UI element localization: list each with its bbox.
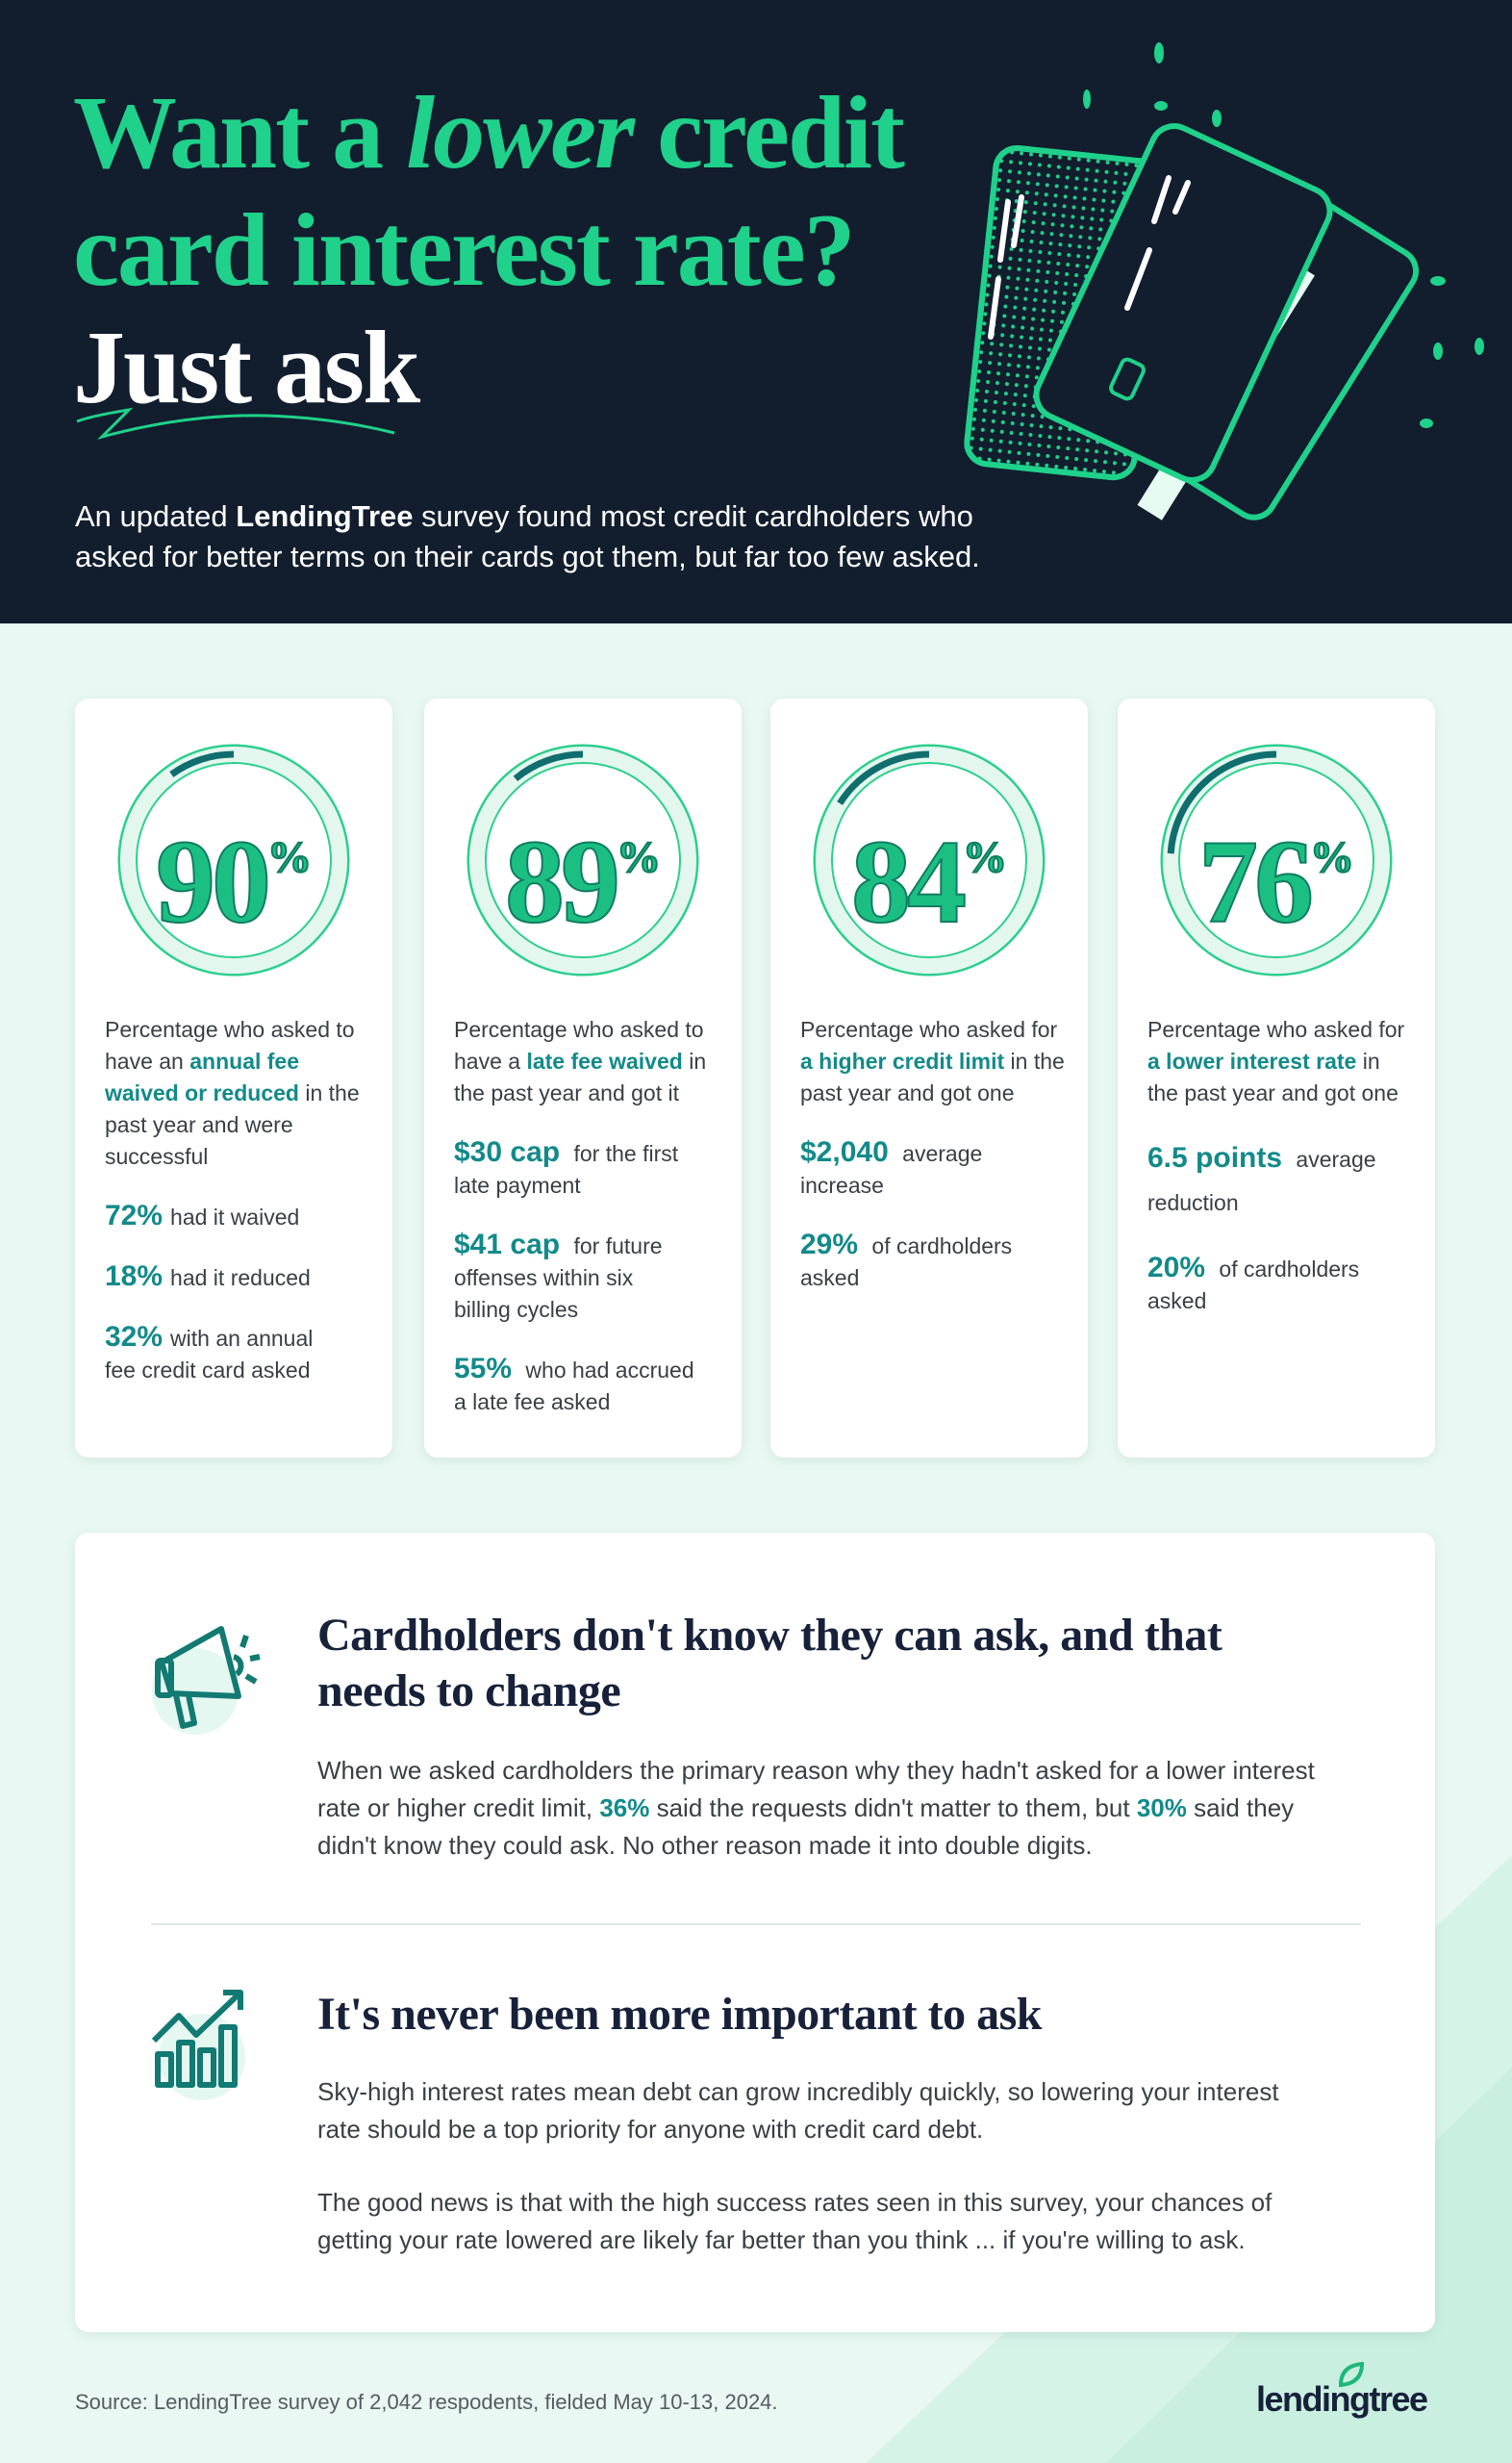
- logo: lendingtree: lendingtree: [1256, 2379, 1427, 2419]
- card text: offenses within six: [454, 1265, 633, 1290]
- card text: past year and got one: [800, 1080, 1014, 1105]
- card text: billing cycles: [454, 1297, 578, 1322]
- card text: Percentage who asked to: [105, 1017, 355, 1042]
- card text: asked: [1147, 1288, 1206, 1313]
- card text: successful: [105, 1144, 208, 1169]
- logo: lendingtree: [1256, 2362, 1427, 2419]
- background diagonal shapes: [866, 1855, 1512, 2463]
- card text: [800, 1017, 1065, 1290]
- card text: a lower interest rate in: [1147, 1049, 1380, 1074]
- card text: [454, 1017, 706, 1414]
- card text: Percentage who asked for: [1147, 1017, 1404, 1042]
- card: credit limit: [770, 698, 1088, 1458]
- title: Just ask: [73, 311, 418, 425]
- icon: growth chart: [152, 1990, 245, 2100]
- card text: 18% had it reduced: [105, 1260, 311, 1292]
- card text: Percentage who asked for: [800, 1017, 1057, 1042]
- subtitle: An updated LendingTree survey found most credit cardholders who asked for better terms on their cards got them, but far too few asked.: [75, 499, 980, 573]
- card text: $41 cap for future: [454, 1229, 663, 1260]
- card text: reduction: [1147, 1190, 1239, 1215]
- card text: fee credit card asked: [105, 1358, 311, 1383]
- card text: have a late fee waived in: [454, 1049, 706, 1074]
- heading: never more important: It's never been more important to ask: [317, 1989, 1042, 2040]
- card: interest rate: [1118, 698, 1435, 1458]
- source: Source: LendingTree survey of 2,042 respodents, fielded May 10-13, 2024.: [75, 2390, 778, 2414]
- heading: cardholders don't know: Cardholders don't know they can ask, and that needs to change: [317, 1610, 1222, 1716]
- title: card interest rate?: [73, 193, 854, 308]
- card text: 20% of cardholders: [1147, 1252, 1359, 1283]
- card text: asked: [800, 1265, 859, 1290]
- ring chart 76%: [1160, 745, 1393, 976]
- card text: the past year and got it: [454, 1080, 679, 1105]
- card text: 72% had it waived: [105, 1200, 299, 1232]
- ring chart 90%: [117, 745, 350, 976]
- card text: a higher credit limit in the: [800, 1049, 1065, 1074]
- card text: waived or reduced in the: [105, 1080, 360, 1105]
- ring chart 89%: [467, 745, 698, 976]
- card text: [1147, 1017, 1404, 1313]
- paragraph 3: The good news is that with the high success rates seen in this survey, your chances of getting your rate lowered are likely far better than you think ... if you're willing to ask.: [317, 2188, 1272, 2254]
- card text: the past year and got one: [1147, 1080, 1399, 1105]
- card: annual fee: [75, 698, 392, 1458]
- card text: 32% with an annual: [105, 1321, 313, 1353]
- paragraph 1: When we asked cardholders the primary reason why they hadn't asked for a lower interest rate or higher credit limit, 36% said the requests didn't matter to them, but 30% said they didn't know they could ask. No other reason made it into double digits.: [317, 1756, 1315, 1860]
- header band: [0, 0, 1512, 623]
- paragraph 2: Sky-high interest rates mean debt can grow incredibly quickly, so lowering your interest rate should be a top priority for anyone with credit card debt.: [317, 2077, 1279, 2144]
- card: late fee: 89%: [505, 816, 661, 948]
- card text: Percentage who asked to: [454, 1017, 704, 1042]
- card text: a late fee asked: [454, 1389, 610, 1414]
- ring chart 84%: [814, 745, 1045, 976]
- card: credit limit: 84%: [851, 816, 1007, 948]
- squiggle underline: [77, 408, 394, 440]
- card text: past year and were: [105, 1112, 293, 1137]
- card text: 6.5 points average: [1147, 1142, 1376, 1174]
- icon: megaphone: [152, 1626, 261, 1735]
- bottom panel: [75, 1533, 1435, 2332]
- card text: 29% of cardholders: [800, 1229, 1012, 1260]
- card text: $30 cap for the first: [454, 1136, 678, 1168]
- card text: $2,040 average: [800, 1136, 982, 1168]
- card text: [105, 1017, 360, 1383]
- card: annual fee: 90%: [156, 816, 312, 948]
- card text: have an annual fee: [105, 1049, 299, 1074]
- card text: 55% who had accrued: [454, 1353, 694, 1384]
- card text: increase: [800, 1173, 884, 1198]
- illustration: credit cards: [964, 42, 1484, 521]
- card: interest rate: 76%: [1198, 816, 1354, 948]
- title: [73, 76, 904, 425]
- title: Want a lower credit: [73, 76, 903, 190]
- card: late fee: [424, 698, 742, 1458]
- card text: late payment: [454, 1173, 581, 1198]
